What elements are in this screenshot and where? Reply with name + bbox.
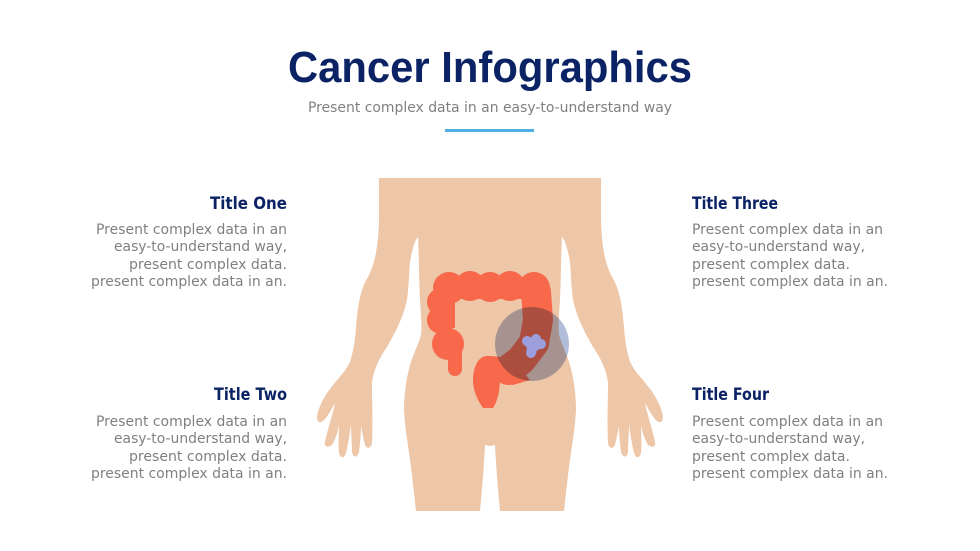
- text block: Title One: present complex data.: [129, 257, 287, 273]
- text block: Title Three: Present complex data in an: [692, 222, 883, 238]
- body silhouette: [317, 178, 663, 511]
- tumour highlight circle: [495, 307, 569, 381]
- text block: Title Four: Present complex data in an: [692, 414, 883, 430]
- text block: Title One: Present complex data in an: [96, 222, 287, 238]
- text block: Title Three: [692, 194, 888, 290]
- text block: Title Four: [692, 385, 888, 482]
- text block: Title Two: Present complex data in an: [96, 414, 287, 430]
- text block: Title Three: Title Three: [692, 194, 778, 214]
- title: Cancer Infographics: [288, 43, 692, 92]
- text block: Title One: present complex data in an.: [91, 274, 287, 290]
- text block: Title Two: easy-to-understand way,: [114, 431, 287, 447]
- text block: Title Two: present complex data.: [129, 449, 287, 465]
- icon: tumour cell: [527, 339, 541, 353]
- colon: [427, 271, 550, 408]
- text block: Title Two: [91, 385, 287, 482]
- text block: Title Four: present complex data in an.: [692, 466, 888, 482]
- text block: Title Two: Title Two: [214, 385, 287, 405]
- text block: Title One: [91, 194, 287, 290]
- text block: Title Four: Title Four: [692, 385, 770, 405]
- text block: Title Three: easy-to-understand way,: [692, 239, 865, 255]
- text block: Title Two: present complex data in an.: [91, 466, 287, 482]
- text block: Title Three: present complex data.: [692, 257, 850, 273]
- right half of body with arm and hand: [490, 178, 663, 511]
- subtitle: Present complex data in an easy-to-understand way: [308, 100, 672, 116]
- text block: Title Four: easy-to-understand way,: [692, 431, 865, 447]
- title underline: [445, 129, 534, 132]
- text block: Title Four: present complex data.: [692, 449, 850, 465]
- text block: Title One: Title One: [210, 194, 287, 214]
- left half of body with arm and hand: [317, 178, 490, 511]
- text block: Title One: easy-to-understand way,: [114, 239, 287, 255]
- text block: Title Three: present complex data in an.: [692, 274, 888, 290]
